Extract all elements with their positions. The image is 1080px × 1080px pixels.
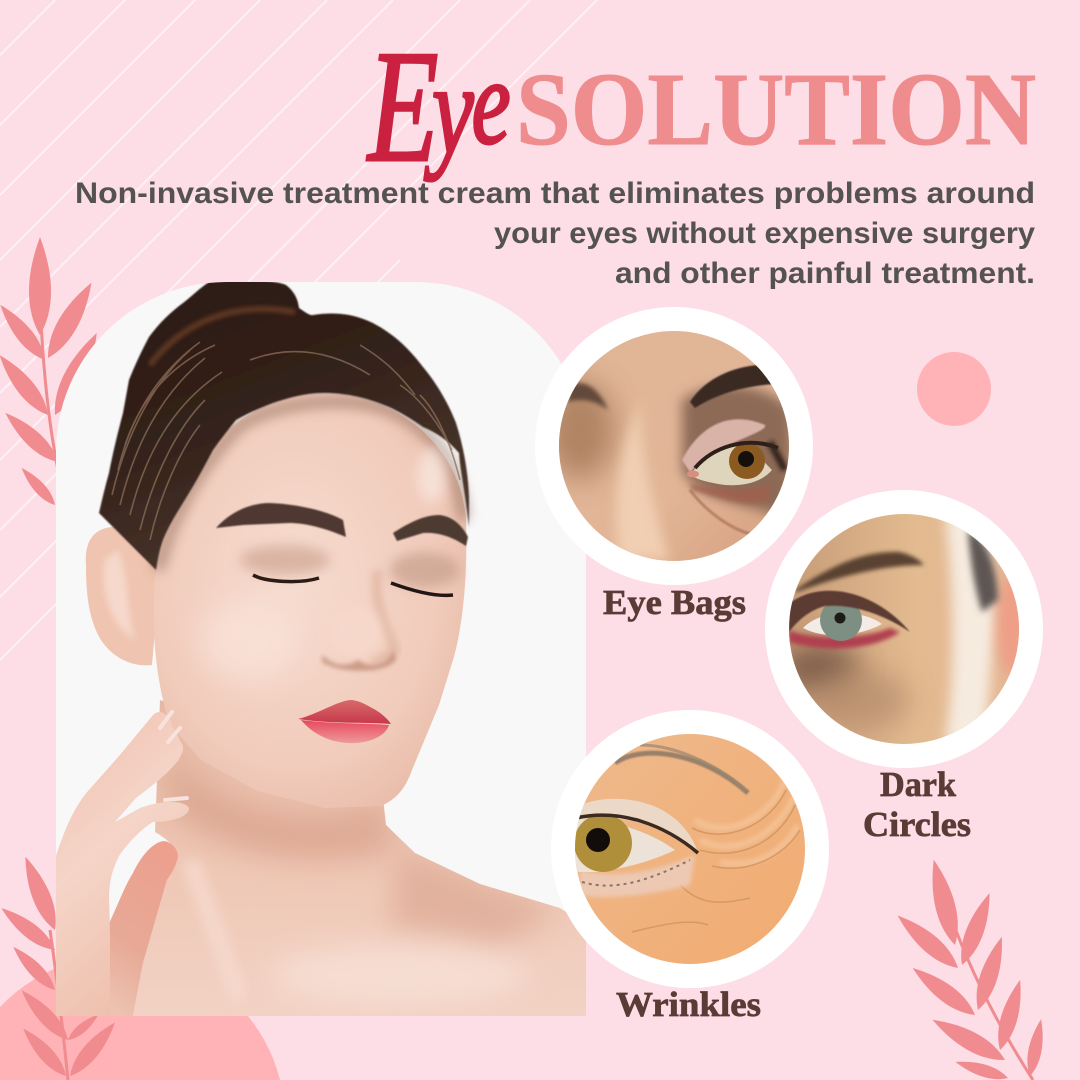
iris <box>574 814 632 872</box>
leaf branch: bottom left <box>0 853 121 1080</box>
pupil <box>586 828 610 852</box>
hair <box>99 280 469 570</box>
bun highlight <box>150 309 295 365</box>
eyelid <box>682 419 765 472</box>
circle: dark circles <box>765 490 1043 768</box>
fingernails <box>160 712 187 800</box>
dark circle under eye <box>780 644 860 692</box>
description text: Non-invasive treatment cream that eliminates problems around <box>75 177 1035 210</box>
ear <box>86 527 160 665</box>
small circle right <box>917 352 991 426</box>
upper lash line <box>695 443 778 468</box>
nose tip highlight <box>364 617 384 644</box>
lower lip <box>301 720 389 743</box>
ear blush <box>998 575 1026 675</box>
photo panel: woman with closed eyes <box>56 280 586 1016</box>
upper lid <box>578 799 698 853</box>
nose side shadow <box>372 570 395 665</box>
lower lashes <box>582 860 690 886</box>
left closed eye <box>253 575 319 582</box>
hairline soft shadow <box>158 402 464 570</box>
circle: wrinkles <box>551 710 829 988</box>
brow <box>795 552 924 592</box>
tear duct <box>687 470 699 478</box>
iris <box>729 443 765 479</box>
under-eye bag <box>690 484 772 504</box>
outer lashes <box>770 442 785 470</box>
eye socket <box>682 386 792 520</box>
sclera <box>803 613 882 635</box>
sternum highlight <box>190 860 240 1000</box>
upper lip <box>298 700 391 724</box>
description text: and other painful treatment. <box>615 257 1035 290</box>
title word: Eye: e <box>472 34 511 169</box>
right closed eye <box>391 583 453 595</box>
shoulders and neck <box>133 700 586 1016</box>
description text <box>75 177 1035 290</box>
temple hair <box>968 530 998 612</box>
body shading <box>165 750 560 1005</box>
pupil <box>738 451 754 467</box>
upper lid <box>789 591 910 632</box>
brow <box>615 753 748 793</box>
label: Dark Circles <box>863 765 971 844</box>
description text: your eyes without expensive surgery <box>494 217 1035 250</box>
thumb <box>110 841 178 1016</box>
right eyebrow <box>393 515 468 546</box>
wrinkle highlights <box>695 780 798 864</box>
shoulder shadow <box>390 850 560 945</box>
right brow <box>690 365 778 408</box>
label: Eye Bags: Eye Bags <box>603 583 746 622</box>
pale band <box>945 514 995 744</box>
iris <box>820 599 862 641</box>
pupil <box>834 612 846 624</box>
face <box>154 393 466 808</box>
leaf branch: bottom right <box>892 857 1047 1080</box>
hair strands <box>112 342 460 540</box>
nose underside <box>322 650 396 671</box>
eyelid shading left <box>240 545 330 575</box>
left shadow <box>545 380 615 480</box>
eyelid shading right <box>390 552 460 588</box>
label: Dark Circles: Circles <box>863 805 971 844</box>
sclera <box>575 820 675 872</box>
title word: SOLUTION: SOLUTION <box>516 52 1036 167</box>
diagonal stripe pattern <box>0 0 597 660</box>
title word: Eye: E <box>366 19 438 196</box>
label: Wrinkles: Wrinkles <box>616 985 761 1024</box>
hand and fingers <box>56 712 189 1016</box>
sclera <box>694 446 772 486</box>
circle: eye bags <box>535 307 813 585</box>
large circle bottom left <box>0 955 280 1080</box>
chest highlight <box>270 945 530 1005</box>
leaf branch: top left <box>0 237 106 509</box>
forehead highlight <box>417 447 447 503</box>
title word: Eye: y <box>424 37 474 182</box>
nose highlight <box>616 400 670 560</box>
upper lash line <box>576 815 698 853</box>
wrinkle lines <box>632 790 800 932</box>
left brow <box>568 383 608 410</box>
red lower lid <box>789 628 900 649</box>
title <box>366 19 1036 196</box>
cheek highlight <box>200 603 294 681</box>
inner ear <box>104 550 135 640</box>
label: Dark Circles: Dark <box>880 765 957 804</box>
lower lid <box>580 855 695 897</box>
neck shadow <box>165 750 392 860</box>
left eyebrow <box>216 503 346 537</box>
